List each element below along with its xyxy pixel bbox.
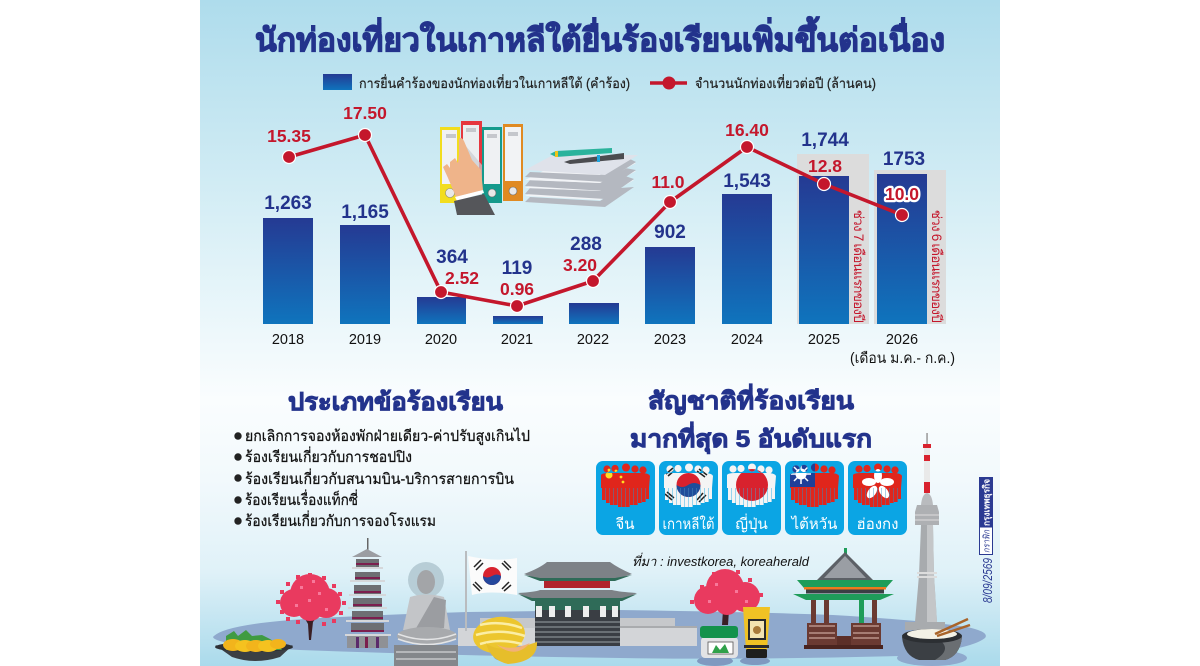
- legend: [323, 74, 876, 91]
- heading: top 5 nationalities: [630, 383, 872, 455]
- illustration: cherry tree right: [690, 569, 763, 625]
- card: Hong Kong: ฮ่องกง: [857, 516, 898, 533]
- card: Taiwan: [785, 461, 844, 535]
- illustration: Buddha statue: [394, 562, 458, 666]
- legend: การยื่นคำร้องของนักท่องเที่ยวในเกาหลีใต้ (คำร้อง): [359, 74, 630, 91]
- complaint list: ร้องเรียนเกี่ยวกับการจองโรงแรม: [245, 510, 436, 530]
- illustration: cosmetics jar: [697, 626, 738, 666]
- line chart: tourists per year: 3.20: [563, 255, 597, 275]
- legend: จำนวนนักท่องเที่ยวต่อปี (ล้านคน): [695, 74, 876, 91]
- credit box: กราฟิก: [982, 530, 992, 553]
- bar chart: complaints per year: 2018: [272, 332, 304, 348]
- card: Japan: ญี่ปุ่น: [735, 513, 768, 534]
- bar chart: complaints per year: 1,744: [801, 130, 849, 151]
- bar chart: complaints per year: [263, 130, 955, 367]
- line chart: tourists per year: 11.0: [651, 172, 685, 192]
- heading: top 5 nationalities: สัญชาติที่ร้องเรียน: [648, 383, 855, 415]
- complaint list: ร้องเรียนเกี่ยวกับสนามบิน-บริการสายการบิน: [245, 468, 514, 488]
- illustration: N Seoul tower: [905, 433, 945, 630]
- card: South Korea: [659, 461, 718, 535]
- illustration: melon: [471, 614, 537, 664]
- illustration: pagoda: [345, 538, 391, 648]
- complaint list: [234, 427, 530, 530]
- icon: paper stack and pens: [525, 148, 638, 207]
- illustration: cherry tree left: [276, 573, 346, 640]
- bar chart: complaints per year: 902: [654, 222, 686, 243]
- bar chart: complaints per year: 1,165: [341, 202, 389, 223]
- background panel: [200, 0, 1000, 666]
- illustration: rice bowl: [897, 619, 970, 666]
- icon: folders and hand: [440, 121, 523, 215]
- illustration: ground shadow: [213, 610, 986, 659]
- illustration: food bowl: [215, 630, 293, 661]
- bar chart: complaints per year: ช่วง 7 เดือนแรกของปี: [851, 210, 866, 323]
- line chart: tourists per year: 12.8: [808, 156, 842, 176]
- card: Japan: [722, 461, 781, 535]
- line chart: tourists per year: 16.40: [725, 120, 769, 140]
- bar chart: complaints per year: 119: [502, 258, 532, 279]
- credit box: [980, 478, 992, 554]
- bar chart: complaints per year: 2025: [808, 332, 840, 348]
- card: Hong Kong: [848, 461, 907, 535]
- card: South Korea: เกาหลีใต้: [662, 515, 714, 533]
- line chart: tourists per year: [267, 103, 919, 312]
- bar chart: complaints per year: 2023: [654, 332, 686, 348]
- line chart: tourists per year: 10.0: [885, 184, 919, 204]
- card: China: [596, 461, 655, 535]
- credit box: กรุงเทพธุรกิจ: [982, 479, 992, 526]
- source note: ที่มา : investkorea, koreaherald: [632, 552, 810, 569]
- complaint list: ร้องเรียนเรื่องแท็กซี่: [245, 489, 358, 509]
- complaint list: ร้องเรียนเกี่ยวกับการชอปปิง: [245, 446, 412, 466]
- complaint list: ยกเลิกการจองห้องพักฝ่ายเดียว-ค่าปรับสูงเกินไป: [245, 427, 530, 445]
- line chart: tourists per year: 15.35: [267, 126, 311, 146]
- bar chart: complaints per year: 2020: [425, 332, 457, 348]
- illustration: fortress wall: [458, 618, 697, 646]
- bar chart: complaints per year: 1,263: [264, 193, 312, 214]
- bar chart: complaints per year: 1,543: [723, 171, 771, 192]
- bar chart: complaints per year: ช่วง 6 เดือนแรกของปี: [929, 210, 944, 323]
- heading: top 5 nationalities: มากที่สุด 5 อันดับแรก: [630, 421, 872, 455]
- line chart: tourists per year: 2.52: [445, 268, 479, 288]
- bar chart: complaints per year: 2019: [349, 332, 381, 348]
- illustration: pavilion: [793, 548, 894, 649]
- card: Taiwan: ไต้หวัน: [791, 515, 837, 533]
- bar chart: complaints per year: 1753: [883, 149, 925, 170]
- heading: complaint types: ประเภทข้อร้องเรียน: [288, 389, 504, 416]
- card: China: จีน: [615, 516, 635, 533]
- bar chart: complaints per year: 364: [436, 247, 468, 268]
- line chart: tourists per year: 17.50: [343, 103, 387, 123]
- bar chart: complaints per year: 2021: [501, 332, 533, 348]
- illustration: Korean flag: [465, 551, 517, 631]
- illustration: cream tube: [740, 607, 770, 665]
- line chart: tourists per year: 0.96: [500, 279, 534, 299]
- bar chart: complaints per year: 2026: [886, 332, 918, 348]
- bar chart: complaints per year: 2024: [731, 332, 763, 348]
- bar chart: complaints per year: (เดือน ม.ค.- ก.ค.): [850, 350, 955, 367]
- date stamp: 8/09/2569: [981, 558, 995, 603]
- bar chart: complaints per year: 2022: [577, 332, 609, 348]
- bar chart: complaints per year: 288: [570, 234, 602, 255]
- illustration: palace: [518, 562, 637, 646]
- title: นักท่องเที่ยวในเกาหลีใต้ยื่นร้องเรียนเพิ่มขึ้นต่อเนื่อง: [255, 16, 945, 58]
